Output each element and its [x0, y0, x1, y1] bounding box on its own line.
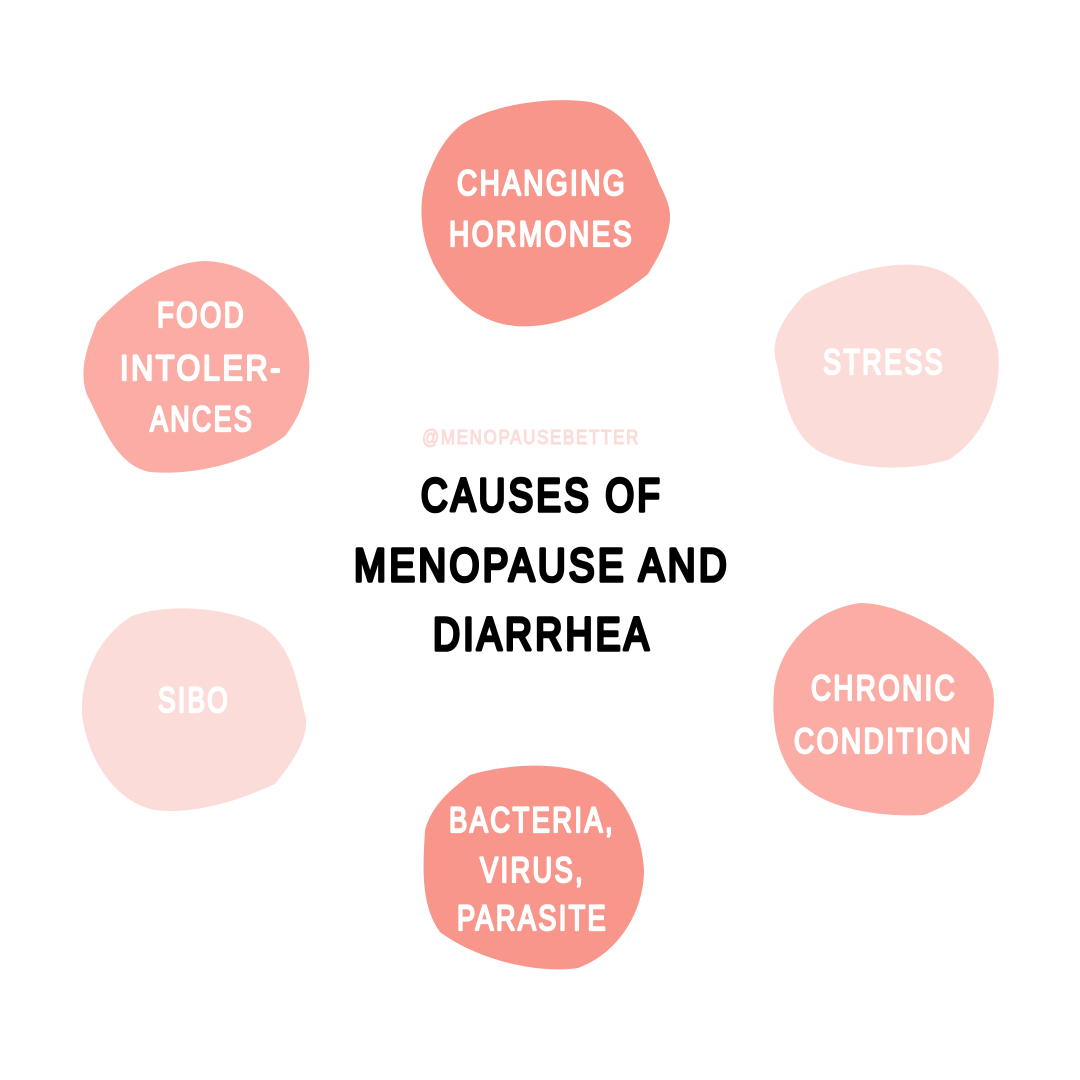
blob: bacteria, virus, parasite	[424, 766, 644, 969]
title: MENOPAUSE AND	[354, 539, 730, 591]
blob: sibo	[82, 608, 306, 811]
label: changing hormones: CHANGING	[457, 164, 627, 203]
blob: stress	[775, 265, 999, 468]
label: chronic condition	[794, 669, 973, 761]
title: CAUSES OF	[421, 469, 663, 521]
label: changing hormones: HORMONES	[449, 215, 634, 254]
title: DIARRHEA	[433, 608, 652, 660]
label: bacteria, virus, parasite: BACTERIA,	[449, 801, 615, 840]
label: bacteria, virus, parasite: PARASITE	[457, 899, 608, 938]
blob: chronic condition	[773, 603, 994, 815]
blob: food intolerances	[83, 261, 309, 473]
blob: changing hormones	[421, 100, 670, 326]
label: food intolerances: INTOLER-	[120, 349, 283, 388]
label: stress: STRESS	[823, 343, 945, 382]
label: food intolerances: FOOD	[157, 296, 246, 335]
label: food intolerances: ANCES	[150, 400, 254, 439]
label: food intolerances	[120, 296, 283, 439]
label: chronic condition: CHRONIC	[811, 669, 957, 708]
title	[354, 469, 730, 660]
label: chronic condition: CONDITION	[794, 722, 973, 761]
label: changing hormones	[449, 164, 634, 254]
label: bacteria, virus, parasite	[449, 801, 615, 938]
handle: @MENOPAUSEBETTER	[422, 427, 640, 449]
label: bacteria, virus, parasite: VIRUS,	[480, 851, 585, 890]
label: sibo: SIBO	[158, 681, 230, 720]
